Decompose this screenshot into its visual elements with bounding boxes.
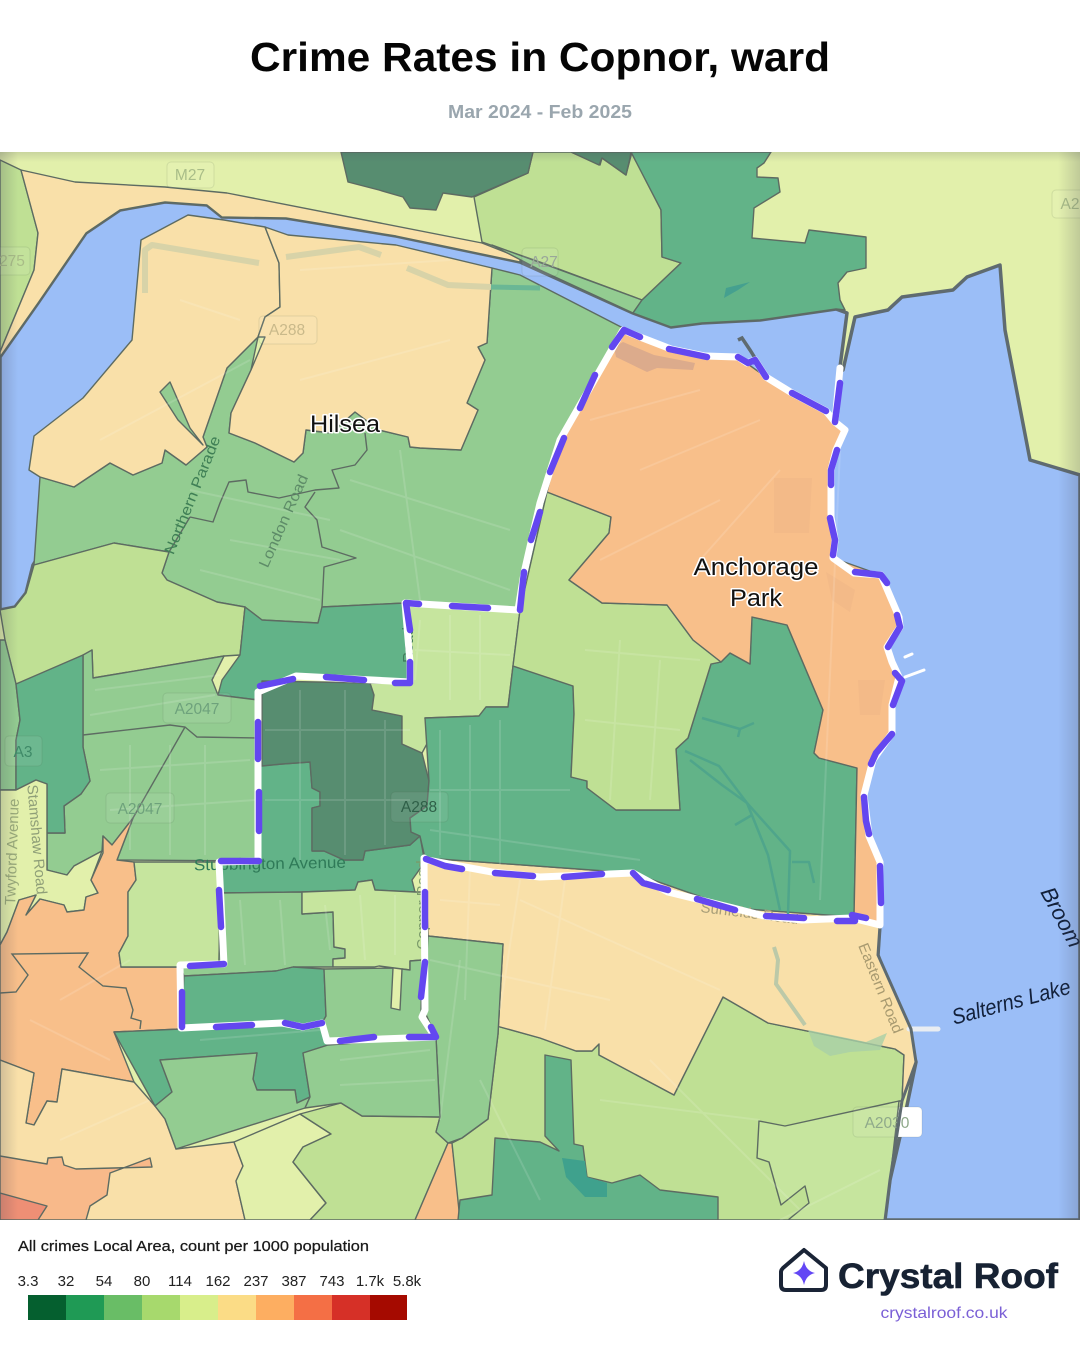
- region: lime west of ward: [119, 862, 220, 967]
- region: bottom lime: [293, 1103, 448, 1220]
- region: north lime: [474, 152, 681, 300]
- region: Hilsea south large light green: [34, 268, 623, 623]
- region: Anchorage Park orange: [547, 330, 900, 925]
- legend tick labels: 114: [168, 1273, 192, 1290]
- legend tick labels: [18, 1273, 422, 1290]
- moat stream: [491, 287, 540, 288]
- region: bottom-left red: [0, 1193, 47, 1220]
- legend title: All crimes Local Area, count per 1000 population: [18, 1239, 369, 1255]
- legend tick labels: 1.7k: [356, 1273, 385, 1290]
- legend tick labels: 3.3: [18, 1273, 38, 1290]
- shield background: A2030 over water: [898, 1107, 922, 1137]
- street texture: [30, 260, 880, 1220]
- region boundary lines: south-west orange: [0, 953, 141, 1029]
- region: ward medium green south: [181, 967, 326, 1029]
- region: ward and Baffins medium green east: [410, 617, 857, 917]
- road labels: A2030: [865, 1115, 910, 1132]
- title: Crime Rates in Copnor, ward: [250, 34, 830, 80]
- street names: London Road: [256, 472, 312, 570]
- small jetty: [738, 338, 755, 358]
- region: north dark green 2: [571, 152, 631, 175]
- region: M27 cream strip: [0, 170, 520, 357]
- region: ward light green north: [180, 892, 345, 976]
- region: south light green 2: [303, 1037, 440, 1117]
- road labels: M27: [175, 167, 205, 184]
- street names: Twyford Avenue: [2, 798, 23, 905]
- region: far west green: [0, 640, 20, 790]
- ward boundary: white casing: [180, 330, 900, 1041]
- street names: Surfields Road: [700, 899, 799, 928]
- legend tick labels: 80: [134, 1273, 150, 1290]
- edge vignette: [0, 152, 1080, 1220]
- region: ward lime south: [302, 880, 425, 970]
- road labels: A3: [14, 744, 32, 761]
- legend tick labels: 237: [243, 1273, 269, 1290]
- region: far north-west lime: [0, 160, 38, 352]
- water: west channel and north creek: [0, 202, 1080, 1220]
- legend tick labels: 32: [58, 1273, 74, 1290]
- road labels: A27: [530, 254, 558, 271]
- legend tick labels: 743: [319, 1273, 345, 1290]
- pond: [724, 282, 750, 298]
- region: south-east lime: [452, 997, 904, 1220]
- place label: Hilsea: Hilsea: [310, 411, 381, 438]
- region: north dark green: [341, 152, 533, 210]
- shield border: A2030: [853, 1107, 922, 1137]
- logo: Crystal Roof: [781, 1250, 1058, 1322]
- icon: house with star: [781, 1250, 826, 1290]
- place label: Anchorage Park: Park: [730, 585, 783, 612]
- ward boundary: purple dashes: [182, 330, 902, 1041]
- place label: Anchorage Park: [694, 554, 818, 612]
- street names: Northern Parade: [161, 434, 224, 557]
- region boundary lines: Hilsea south: [169, 433, 367, 607]
- marsh stream: [774, 947, 887, 1056]
- legend tick labels: 54: [96, 1273, 112, 1290]
- lake: [562, 1158, 607, 1197]
- region boundary lines: west block: [83, 725, 258, 818]
- region: south-east lighter lime: [757, 1101, 899, 1220]
- street names: Copnor Road: [414, 860, 431, 950]
- legend tick labels: 162: [205, 1273, 231, 1290]
- region: thin north strip: [492, 245, 642, 313]
- shaded patches in Anchorage Park: [614, 342, 695, 372]
- region: ward light green south: [322, 960, 435, 1041]
- region: Hilsea west cream: [29, 215, 280, 487]
- road labels: A2047: [118, 801, 162, 818]
- street names: Stamshaw Road: [23, 784, 50, 895]
- region: bottom-left orange: [0, 1156, 152, 1220]
- region: south medium green band: [114, 1023, 328, 1106]
- region: ward medium green inner west: [219, 762, 424, 893]
- street names: [2, 434, 906, 1036]
- road labels: [0, 167, 1079, 1132]
- legend tick labels: 387: [281, 1273, 307, 1290]
- street names: Road: [400, 627, 417, 663]
- road labels: A2047: [175, 701, 219, 718]
- region: Hilsea west inset strip: [160, 382, 203, 445]
- subtitle: date range: Mar 2024 - Feb 2025: [448, 102, 632, 122]
- street names: Stubbington Avenue: [194, 855, 346, 874]
- region: Hilsea east cream: [229, 227, 492, 462]
- place label: Anchorage Park: Anchorage: [694, 554, 818, 581]
- region: west light green block: [47, 650, 258, 875]
- region: south medium green block: [458, 1055, 718, 1220]
- region: south light green: [155, 1053, 310, 1149]
- wordmark: Crystal Roof: [838, 1257, 1058, 1296]
- region: bottom pale lime: [234, 1114, 331, 1220]
- road shields: [0, 162, 1080, 823]
- region: A3 medium green: [16, 655, 90, 833]
- region: Twyford pale lime: [0, 780, 102, 945]
- Baffins pond streams: [685, 718, 814, 914]
- choropleth map panel: [0, 152, 1080, 1220]
- legend colour scale: [28, 1295, 407, 1320]
- street names: Eastern Road: [854, 941, 906, 1036]
- piers: [905, 654, 938, 1029]
- region: north medium green: [631, 152, 866, 327]
- region: orange wedge: [415, 1143, 460, 1220]
- region: ward lime north: [370, 603, 520, 753]
- region: east lime: [513, 492, 721, 810]
- north-east bank and Eastney coast: [878, 925, 916, 1220]
- region: west lime: [0, 543, 245, 684]
- road labels: A288: [269, 322, 305, 339]
- region: central cream: [425, 858, 916, 1101]
- legend: [18, 1239, 422, 1320]
- region: ward dark green: [262, 681, 429, 860]
- region: bottom-left cream: [0, 1060, 245, 1220]
- moat earthworks: [145, 245, 491, 293]
- region: south-west orange: [0, 818, 181, 1125]
- road labels: A288: [401, 799, 437, 816]
- region: medium green north of ward: [218, 603, 410, 700]
- road labels: A2: [1061, 196, 1079, 213]
- legend tick labels: 5.8k: [393, 1273, 422, 1290]
- website url: crystalroof.co.uk: [880, 1305, 1009, 1322]
- region: tall medium-light green: [424, 936, 503, 1143]
